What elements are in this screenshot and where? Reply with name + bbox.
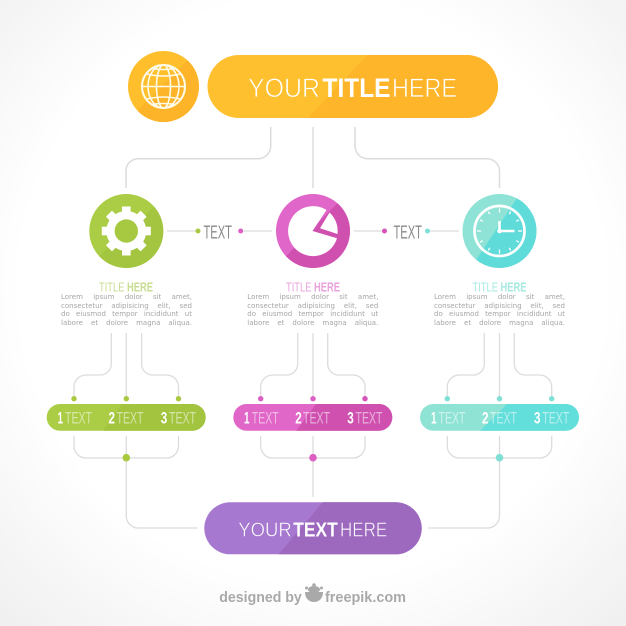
text block: do eiusmod tempor incididunt ut	[247, 310, 378, 318]
merge lines with node	[74, 436, 198, 528]
text block: labore et dolore magna aliqua.	[61, 318, 192, 326]
text block: Lorem ipsum dolor sit amet,	[61, 293, 192, 301]
text block: consectetur adipisicing elit, sed	[434, 302, 565, 310]
panel: teal column	[420, 186, 582, 528]
text block	[61, 293, 193, 329]
pink list pill: TEXT	[252, 410, 279, 428]
text block: consectetur adipisicing elit, sed	[247, 302, 378, 310]
merge lines with node	[261, 436, 365, 497]
pink list pill: 3	[347, 410, 354, 428]
connector: pie to labels	[238, 228, 387, 234]
icon: clock	[462, 194, 536, 268]
icon: pie chart	[276, 194, 350, 268]
text block	[247, 293, 379, 329]
green list pill	[47, 404, 210, 431]
teal list pill: TEXT	[438, 410, 466, 428]
freepik credit: freepik.com	[325, 589, 406, 606]
branch lines with dots	[258, 333, 368, 401]
teal list pill: 3	[534, 410, 540, 428]
text block: Lorem ipsum dolor sit amet,	[247, 293, 378, 301]
text block	[434, 293, 566, 329]
text block: Lorem ipsum dolor sit amet,	[434, 293, 565, 301]
freepik credit: designed by	[219, 589, 302, 606]
panel: green column	[47, 190, 210, 528]
green list pill: 2	[108, 410, 115, 428]
freepik credit	[219, 583, 406, 606]
green list pill: TEXT	[116, 410, 144, 428]
pink list pill	[233, 404, 396, 431]
center label: text right: TEXT	[394, 222, 422, 242]
bottom pill text: YOUR	[238, 519, 292, 542]
bottom pill text	[238, 519, 387, 542]
teal list pill: 1	[431, 410, 436, 428]
heading: title here: TITLE HERE	[472, 280, 527, 294]
bottom pill	[204, 502, 425, 555]
teal list pill	[420, 404, 582, 431]
top connector lines	[126, 127, 500, 188]
teal list pill: TEXT	[542, 410, 569, 428]
pink list pill: 2	[295, 410, 302, 428]
text block: do eiusmod tempor incididunt ut	[61, 310, 192, 318]
bottom pill text: HERE	[340, 519, 387, 542]
teal list pill: 2	[482, 410, 488, 428]
title text	[248, 73, 457, 103]
title text: YOUR	[248, 73, 320, 103]
green list pill: TEXT	[65, 410, 92, 428]
branch lines with dots	[71, 333, 181, 401]
connector: gear to center label	[167, 228, 200, 234]
text block: labore et dolore magna aliqua.	[434, 318, 565, 326]
heading: title here: TITLE HERE	[286, 280, 340, 294]
green list pill: 1	[58, 410, 63, 428]
title text: TITLE	[322, 73, 390, 103]
pink list pill: 1	[244, 410, 250, 428]
branch lines with dots	[445, 333, 554, 401]
text block: do eiusmod tempor incididunt ut	[434, 310, 565, 318]
bottom pill text: TEXT	[293, 519, 338, 542]
merge lines with node	[428, 436, 552, 528]
teal list pill: TEXT	[490, 410, 517, 428]
icon: freepik logo	[305, 583, 323, 602]
title text: HERE	[392, 73, 457, 103]
title pill	[208, 55, 500, 118]
icon: globe badge	[128, 51, 199, 122]
icon: gear	[89, 194, 164, 268]
green list pill: TEXT	[169, 410, 196, 428]
green list pill: 3	[161, 410, 167, 428]
panel: pink column	[233, 190, 396, 497]
pink list pill: TEXT	[303, 410, 330, 428]
connector: label to clock	[425, 228, 459, 234]
text block: labore et dolore magna aliqua.	[247, 318, 378, 326]
center label: text left: TEXT	[204, 222, 232, 242]
pink list pill: TEXT	[356, 410, 382, 428]
heading: title here: TITLE HERE	[99, 280, 153, 294]
text block: consectetur adipisicing elit, sed	[61, 302, 192, 310]
